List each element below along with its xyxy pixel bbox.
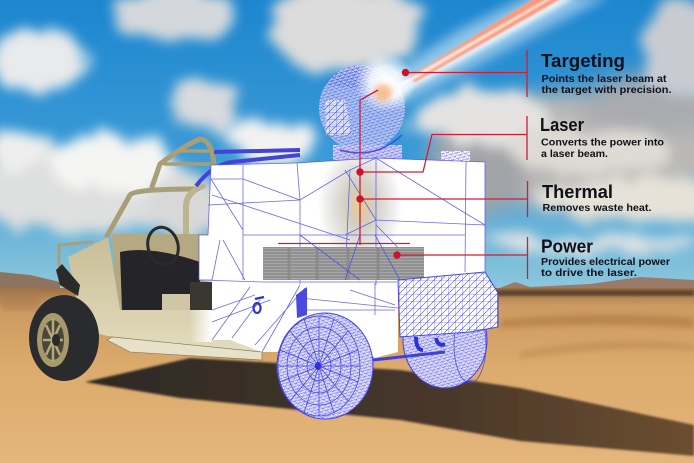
callout: thermal: Thermal: [542, 182, 613, 202]
callout: laser: [356, 115, 664, 176]
laser beam: [355, 0, 610, 112]
clouds: [0, 0, 694, 252]
callout: targeting: [360, 50, 672, 245]
callout: laser: Converts the power into: [541, 138, 664, 148]
front wheel: [29, 295, 99, 381]
callout: thermal: Removes waste heat.: [542, 203, 652, 214]
callout: targeting: Points the laser beam at: [542, 74, 667, 85]
battery pack: [263, 235, 424, 280]
callout: power: [278, 236, 670, 279]
cab interior: [112, 234, 212, 312]
callout: targeting: Targeting: [541, 51, 625, 71]
callout: laser: a laser beam.: [541, 149, 608, 160]
roll cage: [59, 139, 214, 310]
wireframe: turret globe: [319, 65, 405, 160]
callout: power: Provides electrical power: [541, 257, 670, 268]
vehicle: real half: [29, 139, 262, 381]
wireframe: white body: [190, 143, 498, 360]
callout: laser: Laser: [540, 115, 584, 135]
body panels: [68, 237, 262, 352]
wireframe: near wheel: [277, 313, 373, 419]
sky background: [0, 0, 694, 290]
callout: power: Power: [541, 236, 593, 256]
steering wheel: [144, 224, 182, 268]
callout: thermal: [356, 181, 652, 217]
wireframe bracket glyph: [254, 297, 264, 313]
wireframe: rear wheel: [403, 292, 487, 388]
wireframe: blue tubes: [196, 150, 300, 186]
callout: power: to drive the laser.: [541, 268, 637, 279]
callout: targeting: the target with precision.: [542, 85, 672, 96]
front mesh block: [398, 272, 498, 337]
wireframe: small top box: [441, 151, 470, 162]
desert ground: [0, 272, 694, 463]
vehicle shadow on the sand: [85, 358, 694, 456]
